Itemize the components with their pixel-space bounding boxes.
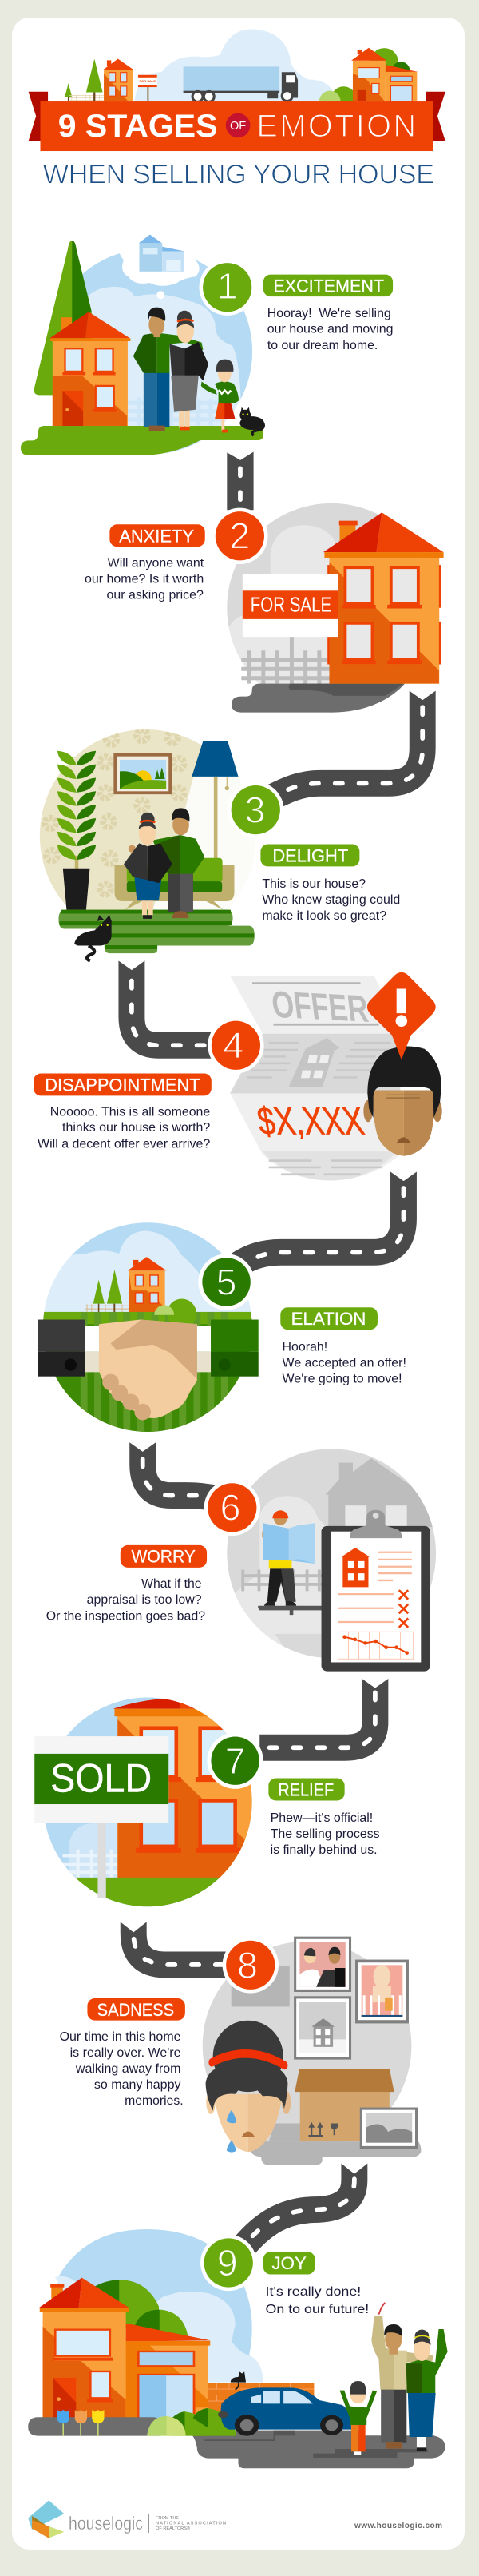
step 6 number bbox=[204, 1480, 260, 1536]
step 8 number bbox=[223, 1937, 279, 1994]
inspector with blueprint bbox=[258, 1510, 324, 1615]
frame: couple photo bbox=[294, 1937, 351, 1992]
step 5 number: 5 bbox=[216, 1262, 237, 1303]
label: delight: DELIGHT bbox=[272, 845, 349, 865]
price: $X,XXX bbox=[254, 1100, 367, 1143]
moving truck bbox=[184, 66, 298, 101]
road from 8 to 9 bbox=[241, 2162, 369, 2249]
clasped hands bbox=[99, 1320, 197, 1420]
alert marker bbox=[367, 972, 436, 1059]
stage 9 uniform layer: road, number, label, text bbox=[200, 2162, 369, 2316]
house icon on clipboard bbox=[342, 1548, 370, 1587]
road from 4 to 5 bbox=[238, 1171, 418, 1265]
newspaper bbox=[230, 976, 400, 1180]
fence bbox=[69, 95, 104, 101]
label: relief: RELIEF bbox=[278, 1779, 334, 1799]
step 2 number bbox=[212, 508, 268, 564]
for sale sign bbox=[243, 574, 338, 637]
road from 1 to 2 bbox=[227, 452, 254, 510]
fence bbox=[241, 1570, 323, 1591]
body text 9: It's really done! bbox=[266, 2285, 361, 2299]
for sale sign: FOR SALE bbox=[251, 593, 331, 617]
road from 7 to 8 bbox=[119, 1921, 228, 1965]
ribbon tail left bbox=[29, 92, 48, 141]
step 4 number: 4 bbox=[223, 1024, 243, 1066]
website: www.houselogic.com bbox=[354, 2522, 442, 2530]
tagline: FROM THE bbox=[156, 2516, 179, 2521]
body text 1: to our dream home. bbox=[267, 339, 378, 352]
step 3 number: 3 bbox=[245, 789, 265, 831]
sky circle with clouds bbox=[82, 253, 252, 454]
label: anxiety: ANXIETY bbox=[119, 526, 194, 546]
body text 2: our asking price? bbox=[107, 589, 204, 602]
cat on wall bbox=[231, 2371, 246, 2390]
worried face bbox=[363, 1046, 442, 1156]
subtitle: WHEN SELLING YOUR HOUSE bbox=[43, 160, 434, 190]
header illustration: street scene bbox=[65, 29, 418, 112]
seated couple bbox=[124, 808, 204, 919]
grass bbox=[21, 426, 263, 455]
tagline: NATIONAL ASSOCIATION bbox=[156, 2522, 226, 2526]
striped rug floor bbox=[58, 910, 255, 953]
label: joy bbox=[263, 2252, 315, 2275]
header bbox=[29, 29, 445, 190]
label: worry bbox=[121, 1545, 207, 1568]
title: 9 stages: 9 STAGES bbox=[58, 109, 217, 144]
step 9 number bbox=[200, 2235, 256, 2291]
step 4 number bbox=[208, 1017, 264, 1073]
step 3 number bbox=[228, 781, 283, 838]
body text 9 bbox=[266, 2285, 369, 2316]
label: worry: WORRY bbox=[132, 1547, 196, 1567]
left house bbox=[103, 58, 133, 101]
plant bbox=[57, 751, 96, 910]
ground bbox=[232, 684, 405, 713]
sky circle bbox=[58, 2229, 252, 2371]
body text 1: Hooray! We're selling bbox=[267, 307, 391, 320]
man bbox=[133, 308, 203, 431]
tall tree bbox=[86, 58, 103, 101]
label: delight bbox=[260, 845, 359, 866]
driveway and ground bbox=[28, 2417, 445, 2468]
offer headline: OFFER bbox=[269, 983, 370, 1030]
brick wall bbox=[208, 2383, 314, 2418]
declining chart bbox=[338, 1632, 414, 1659]
for sale sign: FOR SALE bbox=[139, 80, 156, 83]
road from 6 to 7 bbox=[259, 1678, 390, 1747]
divider bbox=[148, 2514, 149, 2533]
label: sadness: SADNESS bbox=[97, 2000, 174, 2020]
step 8 number: 8 bbox=[237, 1944, 258, 1986]
body text 4: thinks our house is worth? bbox=[62, 1121, 210, 1135]
cloud bbox=[134, 29, 336, 101]
body text 2 bbox=[85, 556, 204, 602]
body text 2: our home? Is it worth bbox=[85, 572, 204, 586]
stage 9: joy bbox=[28, 2162, 448, 2468]
body text 5 bbox=[283, 1341, 406, 1386]
footer bbox=[28, 2500, 442, 2538]
handshake scene circle bbox=[40, 1222, 256, 1434]
body text 1: our house and moving bbox=[267, 323, 393, 336]
body text 6 bbox=[46, 1577, 205, 1623]
stage 6: worry bbox=[46, 1441, 440, 1747]
sad woman face bbox=[206, 2021, 291, 2153]
body text 8: is really over. We're bbox=[70, 2046, 181, 2060]
stage 8 uniform layer: road, number, label, text bbox=[60, 1921, 279, 2108]
left cuff bbox=[38, 1320, 99, 1377]
frame: baby photo bbox=[355, 1960, 409, 2023]
house on newspaper bbox=[289, 1038, 340, 1087]
fence bbox=[241, 637, 329, 684]
grey circle backdrop bbox=[227, 503, 382, 684]
step 9 number: 9 bbox=[217, 2242, 238, 2284]
stage 2: anxiety bbox=[85, 452, 444, 797]
tulips bbox=[57, 2410, 104, 2436]
houselogic logo mark bbox=[28, 2500, 64, 2538]
frame: house photo bbox=[294, 1996, 351, 2060]
label: elation: ELATION bbox=[291, 1309, 366, 1329]
man cheering with keys bbox=[371, 2303, 433, 2449]
body text 7: is finally behind us. bbox=[271, 1843, 378, 1857]
stage 3: delight bbox=[40, 729, 400, 961]
woman cheering bbox=[406, 2329, 448, 2451]
body text 8: memories. bbox=[125, 2094, 184, 2108]
of badge: OF bbox=[230, 120, 246, 133]
frame: landscape photo bbox=[360, 2108, 418, 2149]
cat on floor bbox=[74, 915, 112, 961]
body text 1 bbox=[267, 307, 393, 352]
living room wall bbox=[40, 729, 201, 929]
cat bbox=[240, 407, 264, 435]
stage 5: elation bbox=[38, 1222, 406, 1434]
body text 3 bbox=[262, 877, 400, 923]
step 1 number: 1 bbox=[217, 265, 238, 307]
small house and trees bbox=[85, 1257, 196, 1328]
floor lamp bbox=[192, 741, 238, 859]
right cuff bbox=[197, 1320, 259, 1377]
stage 1: excitement bbox=[21, 233, 393, 459]
body text 8: Our time in this home bbox=[60, 2030, 181, 2044]
step 7 number bbox=[207, 1732, 263, 1789]
step 7 number: 7 bbox=[225, 1740, 246, 1782]
body text 3: This is our house? bbox=[262, 877, 366, 891]
body text 6: Or the inspection goes bad? bbox=[46, 1609, 205, 1623]
body text 2: Will anyone want bbox=[108, 556, 204, 570]
sofa bbox=[114, 858, 234, 910]
child cheering bbox=[340, 2381, 377, 2455]
body text 7: Phew—it's official! bbox=[271, 1811, 373, 1825]
sold sign bbox=[34, 1736, 168, 1898]
title: emotion: EMOTION bbox=[256, 109, 416, 144]
tall tree bbox=[34, 241, 92, 395]
floor bbox=[251, 2123, 421, 2165]
sold scene circle bbox=[40, 1695, 258, 1911]
bushes bbox=[147, 2408, 236, 2436]
step 6 number: 6 bbox=[220, 1487, 241, 1529]
house bbox=[113, 1698, 258, 1878]
body text 8: walking away from bbox=[75, 2062, 181, 2076]
body text 4: Will a decent offer ever arrive? bbox=[38, 1137, 210, 1151]
body text 5: Hoorah! bbox=[283, 1341, 327, 1354]
body text 6: appraisal is too low? bbox=[87, 1593, 202, 1607]
body text 8 bbox=[60, 2030, 184, 2108]
road from 5 to 6 bbox=[128, 1441, 214, 1498]
body text 7: The selling process bbox=[271, 1827, 380, 1841]
tagline bbox=[156, 2516, 226, 2531]
grey circle with house silhouette bbox=[226, 1447, 440, 1661]
body text 5: We're going to move! bbox=[283, 1373, 402, 1386]
right house and bushes bbox=[319, 48, 418, 112]
two storey house bbox=[39, 2278, 211, 2419]
tree behind house bbox=[95, 2280, 188, 2335]
grey backdrop circle bbox=[203, 1941, 411, 2150]
body text 6: What if the bbox=[141, 1577, 202, 1591]
scene, drawn in coordinates from y=2800 at 3x vertical bbox=[28, 2229, 448, 2468]
body text 5: We accepted an offer! bbox=[283, 1356, 406, 1369]
orange house bbox=[323, 512, 444, 684]
small tree bbox=[65, 83, 72, 101]
blue car bbox=[218, 2387, 351, 2436]
stage 4: disappointment bbox=[34, 960, 442, 1265]
moving box bbox=[295, 2069, 394, 2141]
road from 2 to 3 bbox=[272, 690, 437, 797]
house bbox=[49, 312, 130, 426]
tagline: OF REALTORS® bbox=[156, 2526, 191, 2531]
sold sign: SOLD bbox=[50, 1756, 152, 1801]
label: disappointment: DISAPPOINTMENT bbox=[45, 1075, 200, 1095]
of badge bbox=[226, 113, 250, 137]
girl bbox=[201, 360, 239, 432]
label: joy: JOY bbox=[272, 2253, 307, 2273]
body text 4: Nooooo. This is all someone bbox=[50, 1105, 210, 1119]
ribbon tail right bbox=[426, 92, 445, 141]
label: excitement: EXCITEMENT bbox=[273, 276, 384, 296]
label: elation bbox=[280, 1307, 378, 1330]
body text 3: Who knew staging could bbox=[262, 893, 400, 907]
cloud bbox=[55, 2276, 263, 2383]
thought bubble with dream house bbox=[119, 233, 200, 299]
body text 7 bbox=[271, 1811, 380, 1857]
stage 7: relief bbox=[34, 1695, 380, 1911]
woman bbox=[169, 311, 208, 430]
body text 4 bbox=[38, 1105, 210, 1151]
moving scene bbox=[203, 1937, 421, 2165]
banner body bbox=[41, 101, 433, 151]
stage 8: sadness bbox=[60, 1921, 421, 2165]
body text 8: so many happy bbox=[94, 2078, 181, 2092]
for sale sign bbox=[138, 75, 157, 101]
step 2 number: 2 bbox=[229, 515, 250, 556]
grass bbox=[75, 1878, 220, 1906]
body text 3: make it look so great? bbox=[262, 909, 386, 923]
road from 3 to 4 bbox=[117, 960, 214, 1045]
body text 9: On to our future! bbox=[266, 2303, 369, 2316]
step 1 number bbox=[199, 259, 255, 316]
clipboard bbox=[322, 1510, 430, 1672]
wordmark: houselogic bbox=[69, 2513, 143, 2534]
step 5 number bbox=[198, 1254, 255, 1310]
framed picture bbox=[113, 753, 172, 794]
fence bbox=[128, 397, 223, 426]
wallpaper flowers bbox=[45, 730, 184, 895]
title banner bbox=[29, 92, 445, 151]
